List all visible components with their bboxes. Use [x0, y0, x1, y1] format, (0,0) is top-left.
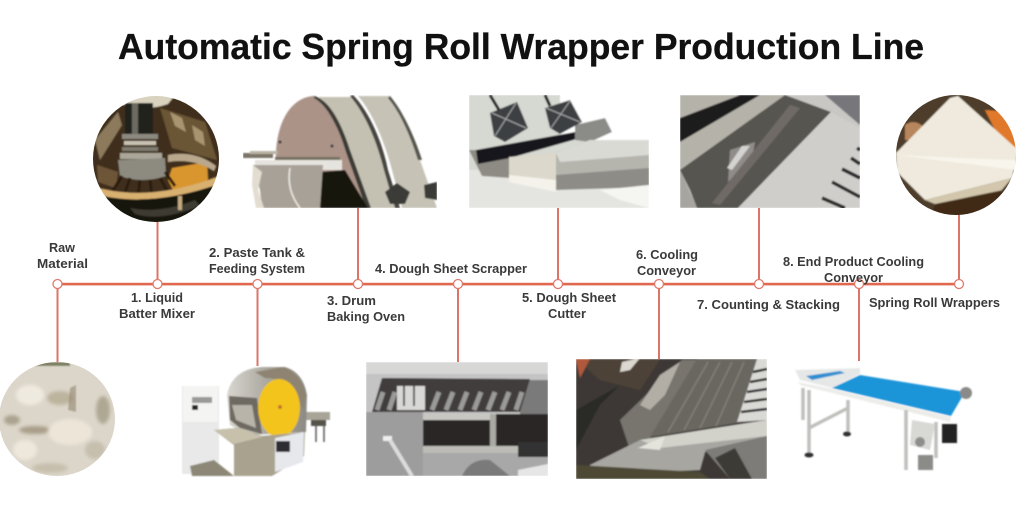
photo: paste tank machine	[182, 367, 330, 476]
label: step 3: 3. Drum	[327, 294, 376, 308]
label: step 8: 8. End Product Cooling	[783, 255, 924, 269]
label: raw material	[37, 241, 88, 271]
label: step 3	[327, 294, 405, 324]
photo: end product conveyor	[795, 368, 972, 470]
label: step 6: Conveyor	[637, 264, 696, 278]
label: step 6	[636, 248, 698, 278]
photo: raw material flour	[0, 360, 118, 478]
label: step 5: Cutter	[548, 307, 586, 321]
connector stems	[58, 208, 959, 366]
photo: cooling conveyor	[680, 95, 860, 208]
label: step 1: Batter Mixer	[119, 307, 195, 321]
label: step 7: 7. Counting & Stacking	[697, 298, 840, 312]
timeline nodes	[53, 280, 964, 288]
photo: dough sheet cutter	[576, 358, 767, 479]
label: step 8	[783, 255, 924, 285]
label: spring roll wrappers: Spring Roll Wrappers	[869, 296, 1000, 310]
label: raw material: Raw	[49, 241, 75, 255]
label: step 6: 6. Cooling	[636, 248, 698, 262]
timeline	[53, 208, 964, 366]
photo: drum baking oven	[243, 95, 437, 208]
photo: dough sheet scrapper detail	[366, 362, 548, 476]
title: Automatic Spring Roll Wrapper Production Line	[118, 26, 924, 67]
label: step 1	[119, 291, 195, 321]
label: step 5	[522, 291, 617, 321]
label: step 3: Baking Oven	[327, 310, 405, 324]
label: step 2: Feeding System	[209, 262, 305, 276]
main horizontal line	[57, 283, 959, 285]
photo: spring roll wrappers	[894, 93, 1018, 218]
label: step 2: 2. Paste Tank &	[209, 246, 305, 260]
label: step 1: 1. Liquid	[131, 291, 183, 305]
photo: dough sheet scrapper	[469, 95, 649, 208]
label: step 5: 5. Dough Sheet	[522, 291, 617, 305]
label: step 2	[209, 246, 305, 276]
photo: liquid batter mixer	[90, 94, 222, 226]
label: raw material: Material	[37, 257, 88, 271]
label: step 4: 4. Dough Sheet Scrapper	[375, 262, 527, 276]
label: step 8: Conveyor	[824, 271, 883, 285]
